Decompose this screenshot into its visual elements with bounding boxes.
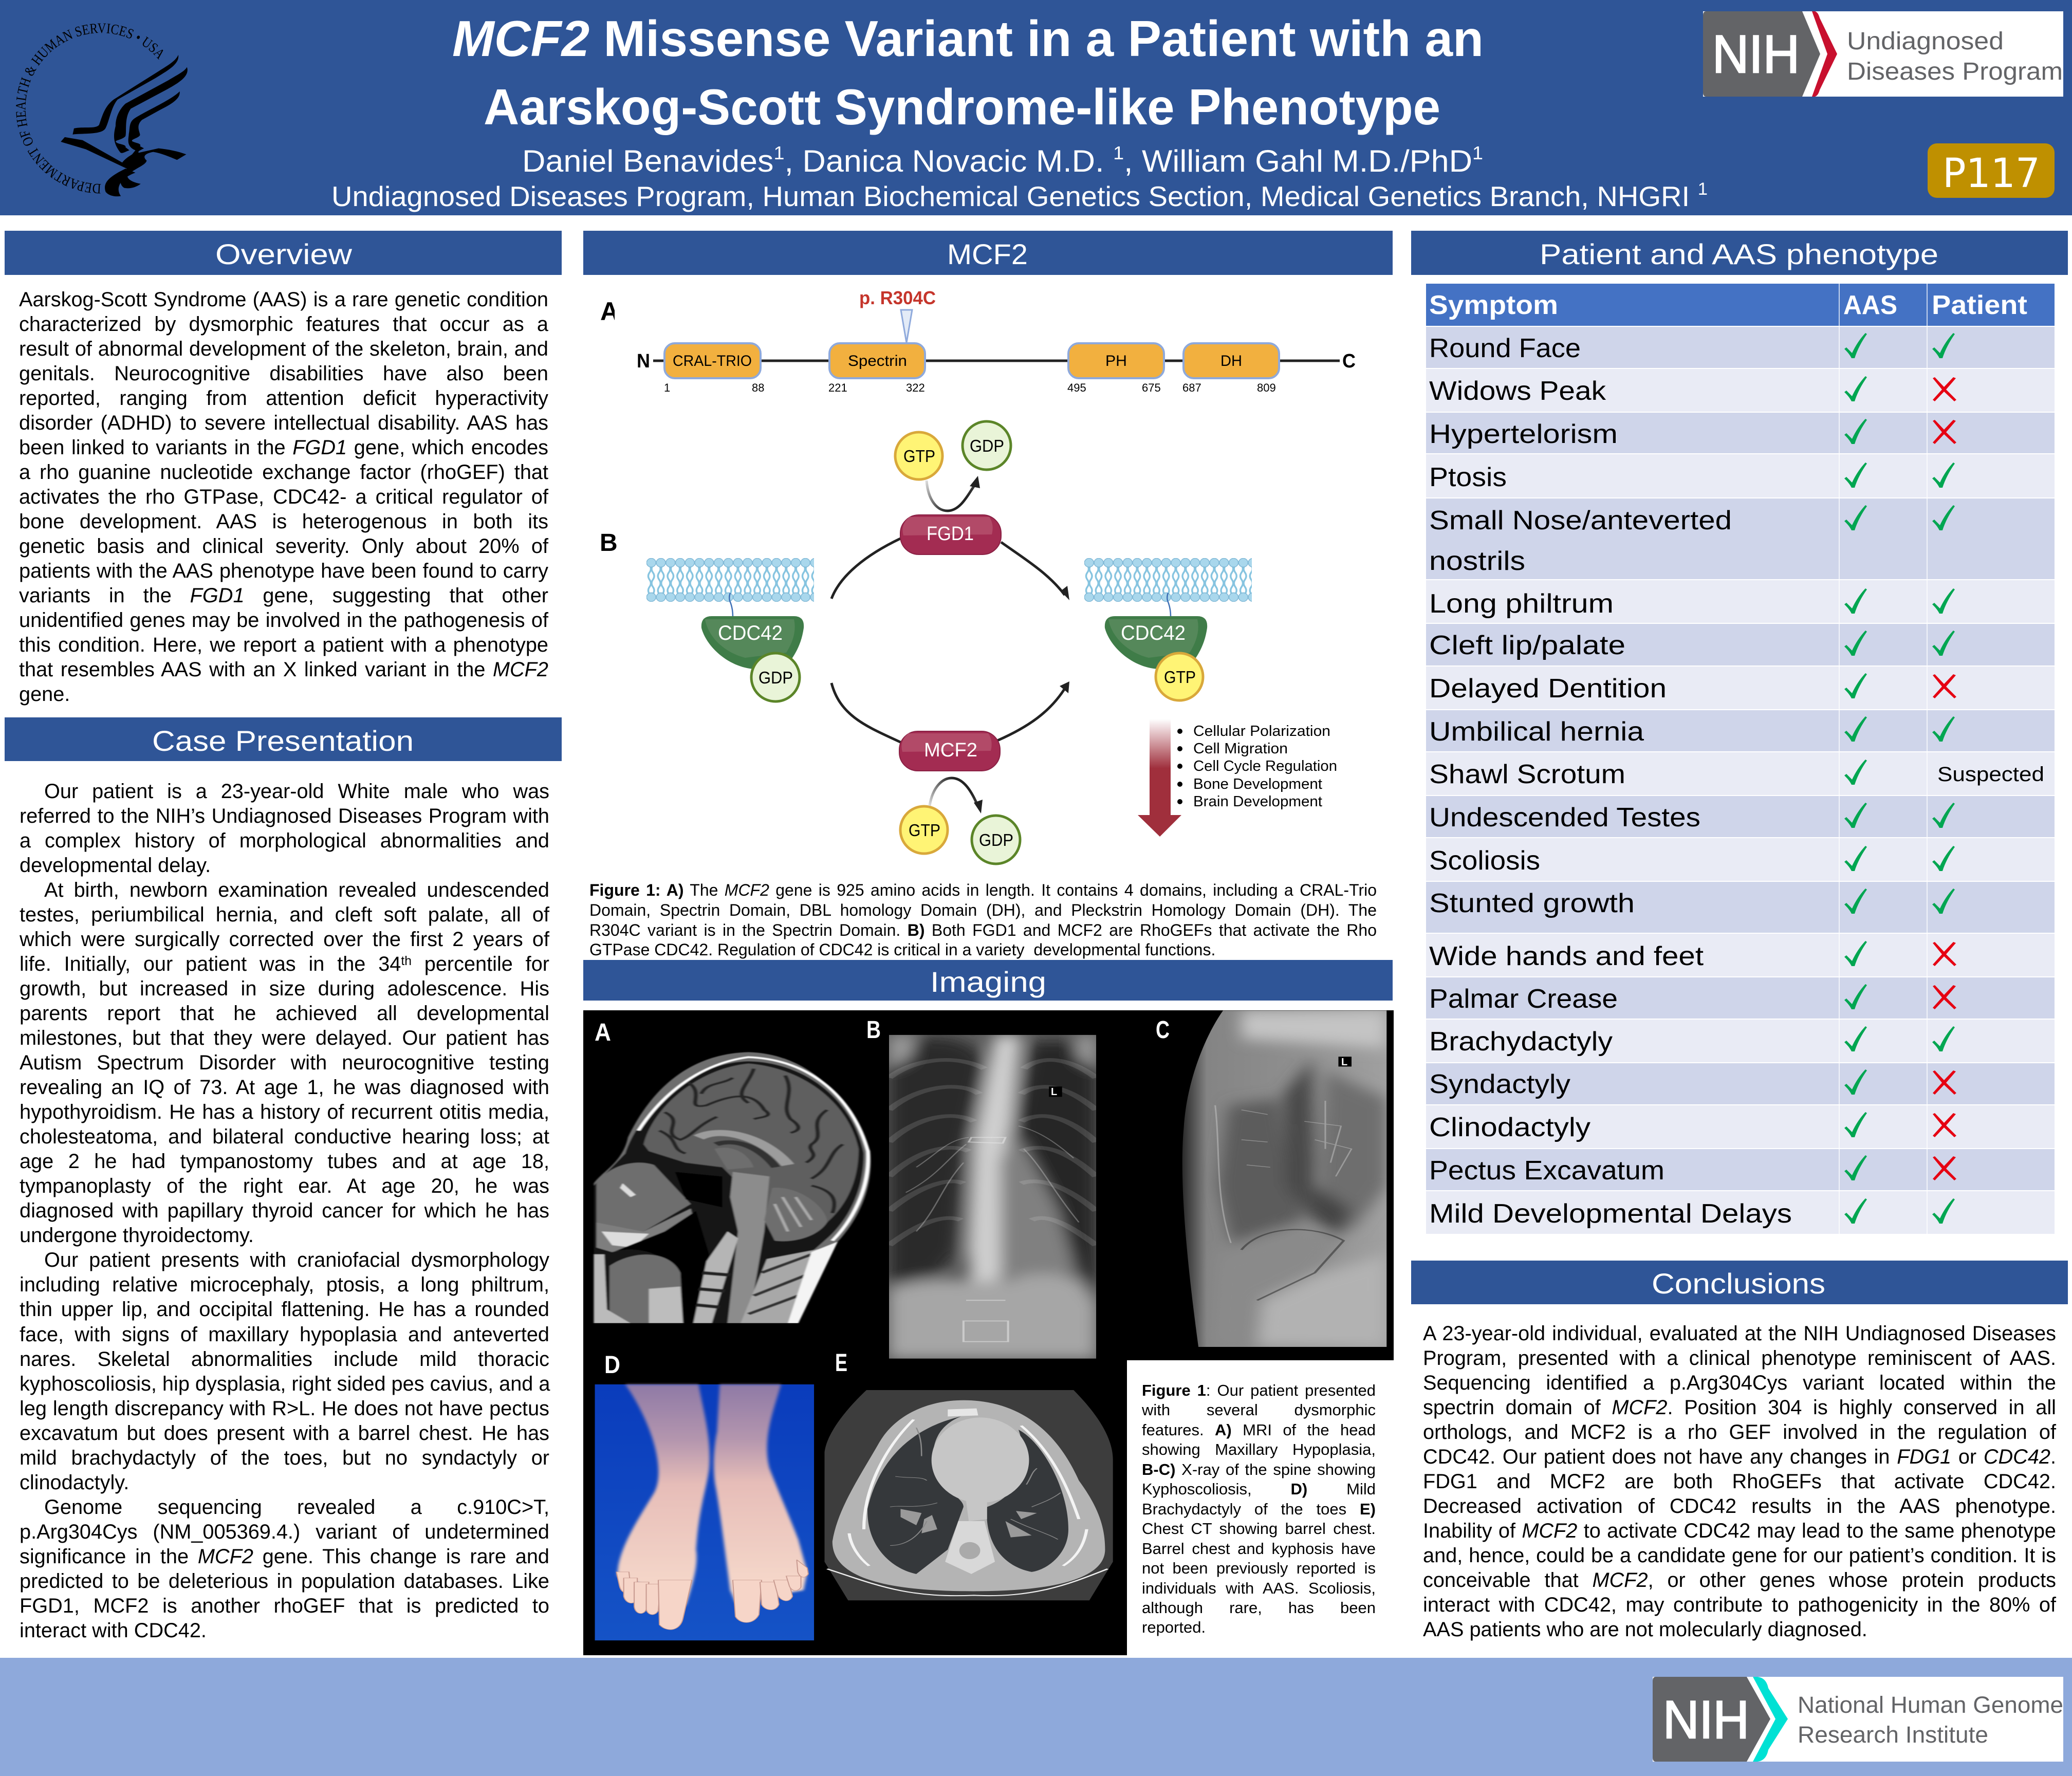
FGD1: FGD1 bbox=[927, 523, 974, 545]
row: Long philtrum bbox=[1426, 580, 2055, 623]
text block: Conclusions: Sequencing identified a p.Arg304Cys variant located within the bbox=[1423, 1372, 2056, 1394]
text block: Overview: genetic basis and clinical severity. Only about 20% of bbox=[19, 535, 548, 558]
GTP to GDP bottom: GTP bbox=[909, 821, 940, 840]
text block: Case Presentation: face, with signs of maxillary hypoplasia and anteverted bbox=[20, 1323, 549, 1346]
text block: Overview: bone development. AAS is heterogenous in both its bbox=[19, 510, 548, 533]
panel A: MCF2 protein domain map: 322 bbox=[906, 381, 925, 394]
text block: Conclusions: Program, presented with a clinical phenotype reminiscent of AAS. bbox=[1423, 1347, 2056, 1370]
CDC42 with GTP: CDC42 bbox=[1121, 622, 1186, 644]
panel A: MCF2 protein domain map: C bbox=[1342, 350, 1356, 372]
authors: 1 bbox=[1472, 142, 1483, 163]
text block: Overview: been linked to variants in the FGD1 gene, which encodes bbox=[19, 436, 548, 459]
caption: imaging figure: reported. bbox=[1142, 1618, 1206, 1636]
text block: Conclusions: FDG1 and MCF2 are both RhoGEFs that activate CDC42. bbox=[1423, 1470, 2056, 1493]
text block: Conclusions: interact with CDC42, may contribute to pathogenicity in the 80% of bbox=[1423, 1594, 2056, 1616]
logo: NIH National Human Genome Research Institute: NIH bbox=[1663, 1690, 1749, 1750]
row: Wide hands and feet bbox=[1426, 934, 2055, 976]
row: Syndactyly bbox=[1426, 1063, 2055, 1104]
image E: chest CT bbox=[824, 1390, 1113, 1600]
text block: Case Presentation: growth, but increased in size during adolescence. His bbox=[20, 977, 549, 1000]
title: MCF2 Missense Variant in a Patient with an bbox=[452, 10, 1484, 67]
toes bbox=[616, 1560, 808, 1630]
row: Small Nose/anteverted nostrils: nostrils bbox=[1429, 546, 1525, 576]
text block: Conclusions: orthologs, and MCF2 is a rho GEF involved in the regulation of bbox=[1423, 1421, 2056, 1444]
FGD1 bbox=[900, 515, 1001, 554]
affiliation: Undiagnosed Diseases Program, Human Biochemical Genetics Section, Medical Genetics Branch, NHGRI bbox=[331, 180, 1663, 212]
text block: Overview: genitals. Neurocognitive disabilities have also been bbox=[19, 362, 548, 385]
image B: frontal spine X-ray bbox=[889, 1035, 1096, 1359]
text block: Case Presentation: diagnosed with papillary thyroid cancer for which he has bbox=[20, 1199, 549, 1222]
panel: imaging black background bbox=[583, 1010, 1394, 1655]
logo: NIH Undiagnosed Diseases Program: Undiagnosed bbox=[1847, 28, 2004, 55]
row: Clinodactyly: Clinodactyly bbox=[1429, 1113, 1590, 1142]
arrows: CDC42 cycle bbox=[831, 539, 1066, 743]
row: Undescended Testes: Undescended Testes bbox=[1429, 803, 1700, 832]
row: Brachydactyly: Brachydactyly bbox=[1429, 1027, 1613, 1057]
logo: NIH Undiagnosed Diseases Program: NIH bbox=[1712, 25, 1800, 84]
caption: MCF2 figure: GTPase CDC42. Regulation of CDC42 is critical in a variety developmental functions. bbox=[589, 940, 1215, 959]
GTP to GDP bottom bbox=[900, 778, 1020, 864]
text block: Case Presentation: excavatum but does present with a barrel chest. He has bbox=[20, 1422, 549, 1445]
text block: Case Presentation bbox=[20, 780, 550, 1642]
text block: Overview: activates the rho GTPase, CDC42- a critical regulator of bbox=[19, 486, 548, 508]
imaging panel letters bbox=[595, 1016, 1170, 1379]
icon: HHS department seal: DEPARTMENT OF HEALTH & HUMAN SERVICES • USA bbox=[16, 24, 163, 193]
text block: Overview: disorder (ADHD) to severe intellectual disability. AAS has bbox=[19, 412, 548, 434]
row: Clinodactyly bbox=[1426, 1105, 2055, 1148]
image A: sagittal head MRI bbox=[594, 1052, 871, 1323]
panel A: MCF2 protein domain map: PH bbox=[1105, 353, 1127, 369]
logo: NIH National Human Genome Research Institute: National Human Genome bbox=[1798, 1692, 2063, 1718]
row: Ptosis bbox=[1426, 454, 2055, 497]
text block: Overview: reported, ranging from attention deficit hyperactivity bbox=[19, 387, 548, 410]
text block: Case Presentation: Autism Spectrum Disorder with neurocognitive testing bbox=[20, 1051, 549, 1074]
text block: Conclusions bbox=[1423, 1322, 2057, 1641]
logo: NIH Undiagnosed Diseases Program bbox=[1703, 11, 2063, 97]
text block: Overview: Aarskog-Scott Syndrome (AAS) is a rare genetic condition bbox=[19, 288, 548, 310]
row: Round Face bbox=[1426, 327, 2055, 368]
image C: lateral spine X-ray bbox=[1182, 1011, 1386, 1347]
text block: Case Presentation: nares. Skeletal abnormalities include mild thoracic bbox=[20, 1348, 549, 1371]
CDC42 with GDP: GDP bbox=[758, 668, 793, 687]
row: Undescended Testes bbox=[1426, 796, 2055, 837]
table header: Symptom bbox=[1429, 290, 1558, 320]
heading: Conclusions: Conclusions bbox=[1652, 1267, 1825, 1300]
text block: Case Presentation: cholesteatoma, and bilateral conductive hearing loss; at bbox=[20, 1125, 549, 1148]
text block: Overview: variants in the FGD1 gene, suggesting that other bbox=[19, 584, 548, 607]
text block: Overview: a rho guanine nucleotide exchange factor (rhoGEF) that bbox=[19, 461, 548, 484]
panel A: MCF2 protein domain map: CRAL-TRIO bbox=[673, 353, 752, 369]
row: Shawl Scrotum: Suspected bbox=[1937, 763, 2044, 786]
text block: Case Presentation: milestones, but that they were delayed. Our patient has bbox=[20, 1027, 549, 1049]
table header: Patient bbox=[1932, 290, 2027, 320]
panel A: MCF2 protein domain map: 495 bbox=[1067, 381, 1086, 394]
heading: Patient and AAS phenotype bbox=[1411, 231, 2068, 275]
row: Scoliosis bbox=[1426, 838, 2055, 881]
text block: Case Presentation: a complex history of morphological abnormalities and bbox=[20, 829, 549, 852]
text block: Case Presentation: parents report that he achieved all developmental bbox=[20, 1002, 549, 1025]
row: Small Nose/anteverted nostrils: Small Nose/anteverted bbox=[1429, 506, 1732, 535]
panel A: MCF2 protein domain map: 88 bbox=[752, 381, 764, 394]
MCF2 bbox=[899, 731, 1000, 771]
panel A: MCF2 protein domain map: N bbox=[637, 350, 650, 372]
image D: patient's feet photo bbox=[595, 1384, 814, 1640]
row: Widows Peak: Widows Peak bbox=[1429, 376, 1606, 406]
row: Syndactyly: Syndactyly bbox=[1429, 1069, 1570, 1099]
heading: Imaging bbox=[583, 960, 1393, 1001]
panel A: MCF2 protein domain map: 1 bbox=[664, 381, 670, 394]
text block: Case Presentation: tympanoplasty of the right ear. At age 20, he was bbox=[20, 1175, 549, 1197]
row: Mild Developmental Delays bbox=[1426, 1191, 2055, 1234]
caption: imaging figure: Kyphoscoliosis, D) Mild bbox=[1142, 1480, 1376, 1498]
authors: Daniel Benavides bbox=[522, 144, 762, 178]
text block: Overview: unidentified genes may be involved in the pathogenesis of bbox=[19, 609, 548, 632]
caption: imaging figure: B-C) X-ray of the spine showing bbox=[1142, 1460, 1376, 1478]
text block: Case Presentation: including relative microcephaly, ptosis, a long philtrum, bbox=[20, 1273, 549, 1296]
row: Shawl Scrotum bbox=[1426, 752, 2055, 795]
row: Wide hands and feet: Wide hands and feet bbox=[1429, 941, 1704, 971]
text block: Case Presentation: age 2 he had tympanostomy tubes and at age 18, bbox=[20, 1150, 549, 1173]
caption: imaging figure: with several dysmorphic bbox=[1142, 1401, 1376, 1419]
heading: Case Presentation bbox=[5, 717, 562, 761]
panel B: CDC42 activation pathway bbox=[600, 421, 1337, 864]
row: Cleft lip/palate bbox=[1426, 624, 2055, 665]
caption: imaging figure: Figure 1: Our patient presented bbox=[1142, 1381, 1376, 1399]
authors: , William Gahl M.D./PhD bbox=[1124, 144, 1472, 178]
GTP to GDP top: GDP bbox=[970, 436, 1004, 455]
text block: Case Presentation: At birth, newborn examination revealed undescended bbox=[44, 879, 549, 901]
text block: Case Presentation: p.Arg304Cys (NM_005369.4.) variant of undetermined bbox=[20, 1521, 549, 1543]
text block: Conclusions: Decreased activation of CDC42 results in the AAS phenotype. bbox=[1423, 1495, 2056, 1518]
heading: MCF2 bbox=[583, 231, 1393, 275]
list: CDC42 functions: Cell Migration bbox=[1193, 741, 1288, 757]
membrane right bbox=[1084, 558, 1252, 602]
text block: Case Presentation: kyphoscoliosis, hip dysplasia, right sided pes cavius, and a bbox=[20, 1373, 550, 1395]
row: Hypertelorism: Hypertelorism bbox=[1429, 419, 1618, 449]
CDC42 with GTP: GTP bbox=[1164, 668, 1196, 687]
text block: Case Presentation: undergone thyroidectomy. bbox=[20, 1224, 254, 1247]
text block: Case Presentation: Genome sequencing revealed a c.910C>T, bbox=[44, 1496, 549, 1519]
image C: lateral spine X-ray: L bbox=[1341, 1057, 1347, 1068]
text block: Case Presentation: life. Initially, our patient was in the 34th percentile for bbox=[20, 953, 549, 975]
CDC42 with GTP bbox=[1105, 616, 1207, 700]
row: Stunted growth: Stunted growth bbox=[1429, 889, 1635, 918]
text block: Conclusions: A 23-year-old individual, evaluated at the NIH Undiagnosed Diseases bbox=[1423, 1322, 2056, 1344]
caption: MCF2 figure: Figure 1: A) The MCF2 gene is 925 amino acids in length. It contains 4 domains, including a CRAL-Trio bbox=[589, 881, 1377, 899]
text block: Case Presentation: testes, periumbilical hernia, and cleft soft palate, all of bbox=[20, 903, 549, 926]
poster number badge: P117 bbox=[1942, 151, 2040, 197]
heading: Overview: Overview bbox=[215, 238, 353, 270]
text block: Conclusions: AAS patients who are not molecularly diagnosed. bbox=[1423, 1618, 1867, 1641]
row: Palmar Crease: Palmar Crease bbox=[1429, 984, 1618, 1014]
text block: Case Presentation: significance in the MCF2 gene. This change is rare and bbox=[20, 1545, 549, 1568]
text block: Case Presentation: referred to the NIH’s Undiagnosed Diseases Program with bbox=[20, 805, 549, 827]
logo: NIH National Human Genome Research Institute bbox=[1653, 1677, 2063, 1762]
text block: Overview bbox=[19, 288, 549, 706]
text block: Case Presentation: mild brachydactyly of the toes, but no syndactyly or bbox=[20, 1447, 549, 1469]
imaging panel letters: D bbox=[604, 1352, 620, 1379]
table header bbox=[1426, 284, 2055, 326]
arrow: downstream effects bbox=[1138, 719, 1181, 837]
text block: Conclusions: spectrin domain of MCF2. Position 304 is highly conserved in all bbox=[1423, 1396, 2056, 1419]
row: Delayed Dentition: Delayed Dentition bbox=[1429, 674, 1667, 704]
GTP to GDP top bbox=[895, 421, 1011, 511]
imaging panel letters: C bbox=[1156, 1016, 1170, 1044]
row: Brachydactyly bbox=[1426, 1020, 2055, 1062]
panel A: MCF2 protein domain map: 687 bbox=[1182, 381, 1201, 394]
imaging panel letters: B bbox=[866, 1016, 881, 1044]
list: CDC42 functions: Cell Cycle Regulation bbox=[1193, 758, 1337, 774]
text block: Conclusions: conceivable that MCF2, or other genes whose protein products bbox=[1423, 1569, 2056, 1592]
list: CDC42 functions: Cellular Polarization bbox=[1193, 723, 1330, 739]
authors: 1 bbox=[773, 142, 784, 163]
authors: , Danica Novacic M.D. bbox=[784, 144, 1113, 178]
MCF2: MCF2 bbox=[924, 739, 977, 761]
list: CDC42 functions: Brain Development bbox=[1193, 793, 1322, 810]
row: Umbilical hernia bbox=[1426, 710, 2055, 751]
GTP to GDP bottom: GDP bbox=[979, 830, 1013, 849]
title bbox=[452, 10, 1484, 135]
row: Palmar Crease bbox=[1426, 977, 2055, 1019]
text block: Case Presentation: clinodactyly. bbox=[20, 1471, 129, 1494]
text block: Case Presentation: FGD1, MCF2 is another rhoGEF that is predicted to bbox=[20, 1595, 549, 1617]
caption: imaging figure: showing Maxillary Hypoplasia, bbox=[1142, 1440, 1376, 1458]
caption: imaging figure: Barrel chest and kyphosis have bbox=[1142, 1540, 1376, 1558]
text block: Case Presentation: revealing an IQ of 73. At age 1, he was diagnosed with bbox=[20, 1076, 549, 1099]
heading: Case Presentation: Case Presentation bbox=[152, 725, 414, 757]
row: Umbilical hernia: Umbilical hernia bbox=[1429, 717, 1644, 747]
panel A: MCF2 protein domain map: 809 bbox=[1257, 381, 1276, 394]
CDC42 with GDP bbox=[701, 616, 804, 701]
text block: Overview: result of abnormal development of the skeleton, brain, and bbox=[19, 338, 548, 360]
row: Small Nose/anteverted nostrils bbox=[1426, 498, 2055, 579]
footer band bbox=[0, 1658, 2072, 1776]
caption: imaging figure: Chest CT showing barrel chest. bbox=[1142, 1520, 1376, 1538]
title: Aarskog-Scott Syndrome-like Phenotype bbox=[484, 79, 1440, 135]
image B: frontal spine X-ray: L bbox=[1051, 1086, 1057, 1098]
panel A: MCF2 protein domain map bbox=[600, 287, 1356, 394]
poster number badge bbox=[1928, 143, 2055, 198]
text block: Case Presentation: which were surgically corrected over the first 2 years of bbox=[20, 928, 549, 951]
text block: Overview: characterized by dysmorphic features that occur as a bbox=[19, 313, 548, 336]
panel A: MCF2 protein domain map: 675 bbox=[1142, 381, 1161, 394]
row: Scoliosis: Scoliosis bbox=[1429, 846, 1540, 876]
table header: AAS bbox=[1843, 290, 1897, 320]
caption: imaging figure: Brachydactyly of the toes E) bbox=[1142, 1500, 1376, 1518]
row: Stunted growth bbox=[1426, 882, 2055, 933]
panel A: MCF2 protein domain map: 221 bbox=[828, 381, 847, 394]
row: Hypertelorism bbox=[1426, 413, 2055, 453]
text block: Case Presentation: Our patient presents with craniofacial dysmorphology bbox=[44, 1249, 549, 1271]
logo: NIH Undiagnosed Diseases Program: Diseases Program bbox=[1847, 58, 2063, 85]
heading: Overview bbox=[5, 231, 562, 275]
panel A: MCF2 protein domain map: A bbox=[600, 297, 619, 326]
CDC42 with GDP: CDC42 bbox=[718, 622, 783, 644]
caption: MCF2 figure: Domain, Spectrin Domain, DBL homology Domain (DH), and Pleckstrin Homology Domain (DH). The bbox=[589, 901, 1377, 919]
logo: NIH National Human Genome Research Institute: Research Institute bbox=[1798, 1722, 1988, 1748]
panel B: CDC42 activation pathway: B bbox=[600, 529, 618, 557]
row: Pectus Excavatum bbox=[1426, 1149, 2055, 1190]
text block: Conclusions: CDC42. Our patient does not have any changes in FDG1 or CDC42. bbox=[1423, 1446, 2056, 1468]
heading: Patient and AAS phenotype: Patient and AAS phenotype bbox=[1540, 238, 1938, 270]
text block: Overview: gene. bbox=[19, 683, 70, 706]
panel A: MCF2 protein domain map: Spectrin bbox=[848, 353, 907, 369]
GTP to GDP top: GTP bbox=[903, 447, 935, 466]
caption: imaging figure: not been previously reported is bbox=[1142, 1559, 1376, 1577]
row: Ptosis: Ptosis bbox=[1429, 462, 1507, 492]
authors: 1 bbox=[1113, 142, 1124, 163]
heading: Imaging: Imaging bbox=[930, 966, 1046, 998]
header banner background bbox=[0, 0, 2072, 215]
text block: Case Presentation: predicted to be deleterious in population databases. Like bbox=[20, 1570, 549, 1593]
panel A: MCF2 protein domain map: p. R304C bbox=[859, 287, 936, 308]
caption: imaging figure: although rare, has been bbox=[1142, 1599, 1376, 1617]
row: Shawl Scrotum: Shawl Scrotum bbox=[1429, 760, 1625, 789]
text block: Case Presentation: leg length discrepancy with R>L. He does not have pectus bbox=[20, 1397, 549, 1420]
imaging panel letters: A bbox=[595, 1019, 611, 1046]
row: Cleft lip/palate: Cleft lip/palate bbox=[1429, 631, 1625, 660]
caption: imaging figure bbox=[1142, 1381, 1376, 1636]
text block: Case Presentation: developmental delay. bbox=[20, 854, 211, 877]
heading: Conclusions bbox=[1411, 1261, 2068, 1304]
row: Widows Peak bbox=[1426, 369, 2055, 412]
table: symptom comparison bbox=[1426, 284, 2055, 1234]
text block: Overview: this condition. Here, we report a patient with a phenotype bbox=[19, 634, 548, 656]
text block: Overview: that resembles AAS with an X linked variant in the MCF2 bbox=[19, 658, 548, 681]
imaging panel letters: E bbox=[835, 1349, 847, 1377]
text block: Conclusions: and, hence, could be a candidate gene for our patient’s condition. It is bbox=[1423, 1544, 2056, 1567]
caption: MCF2 figure: R304C variant is in the Spectrin Domain. B) Both FGD1 and MCF2 are RhoGEFs that activate the Rho bbox=[589, 921, 1377, 939]
list: CDC42 functions bbox=[1177, 723, 1337, 810]
caption: imaging figure: features. A) MRI of the head bbox=[1142, 1421, 1376, 1439]
row: Mild Developmental Delays: Mild Developmental Delays bbox=[1429, 1199, 1792, 1229]
caption: imaging figure: individuals with AAS. Scoliosis, bbox=[1142, 1579, 1376, 1597]
row: Pectus Excavatum: Pectus Excavatum bbox=[1429, 1156, 1664, 1186]
caption: MCF2 figure bbox=[589, 881, 1377, 959]
text block: Case Presentation: Our patient is a 23-year-old White male who was bbox=[44, 780, 549, 803]
text block: Case Presentation: interact with CDC42. bbox=[20, 1619, 207, 1642]
row: Round Face: Round Face bbox=[1429, 334, 1581, 363]
text block: Conclusions: Inability of MCF2 to activate CDC42 may lead to the same phenotype bbox=[1423, 1520, 2056, 1542]
affiliation: 1 bbox=[1698, 179, 1708, 199]
row: Delayed Dentition bbox=[1426, 667, 2055, 709]
list: CDC42 functions: Bone Development bbox=[1193, 776, 1322, 792]
membrane left bbox=[646, 558, 814, 602]
text block: Overview: patients with the AAS phenotype have been found to carry bbox=[19, 560, 548, 582]
heading: MCF2: MCF2 bbox=[947, 238, 1028, 270]
text block: Case Presentation: hypothyroidism. He has a history of recurrent otitis media, bbox=[20, 1101, 549, 1123]
panel A: MCF2 protein domain map: DH bbox=[1220, 353, 1242, 369]
row: Long philtrum: Long philtrum bbox=[1429, 589, 1614, 619]
text block: Case Presentation: thin upper lip, and occipital flattening. He has a rounded bbox=[20, 1298, 549, 1321]
